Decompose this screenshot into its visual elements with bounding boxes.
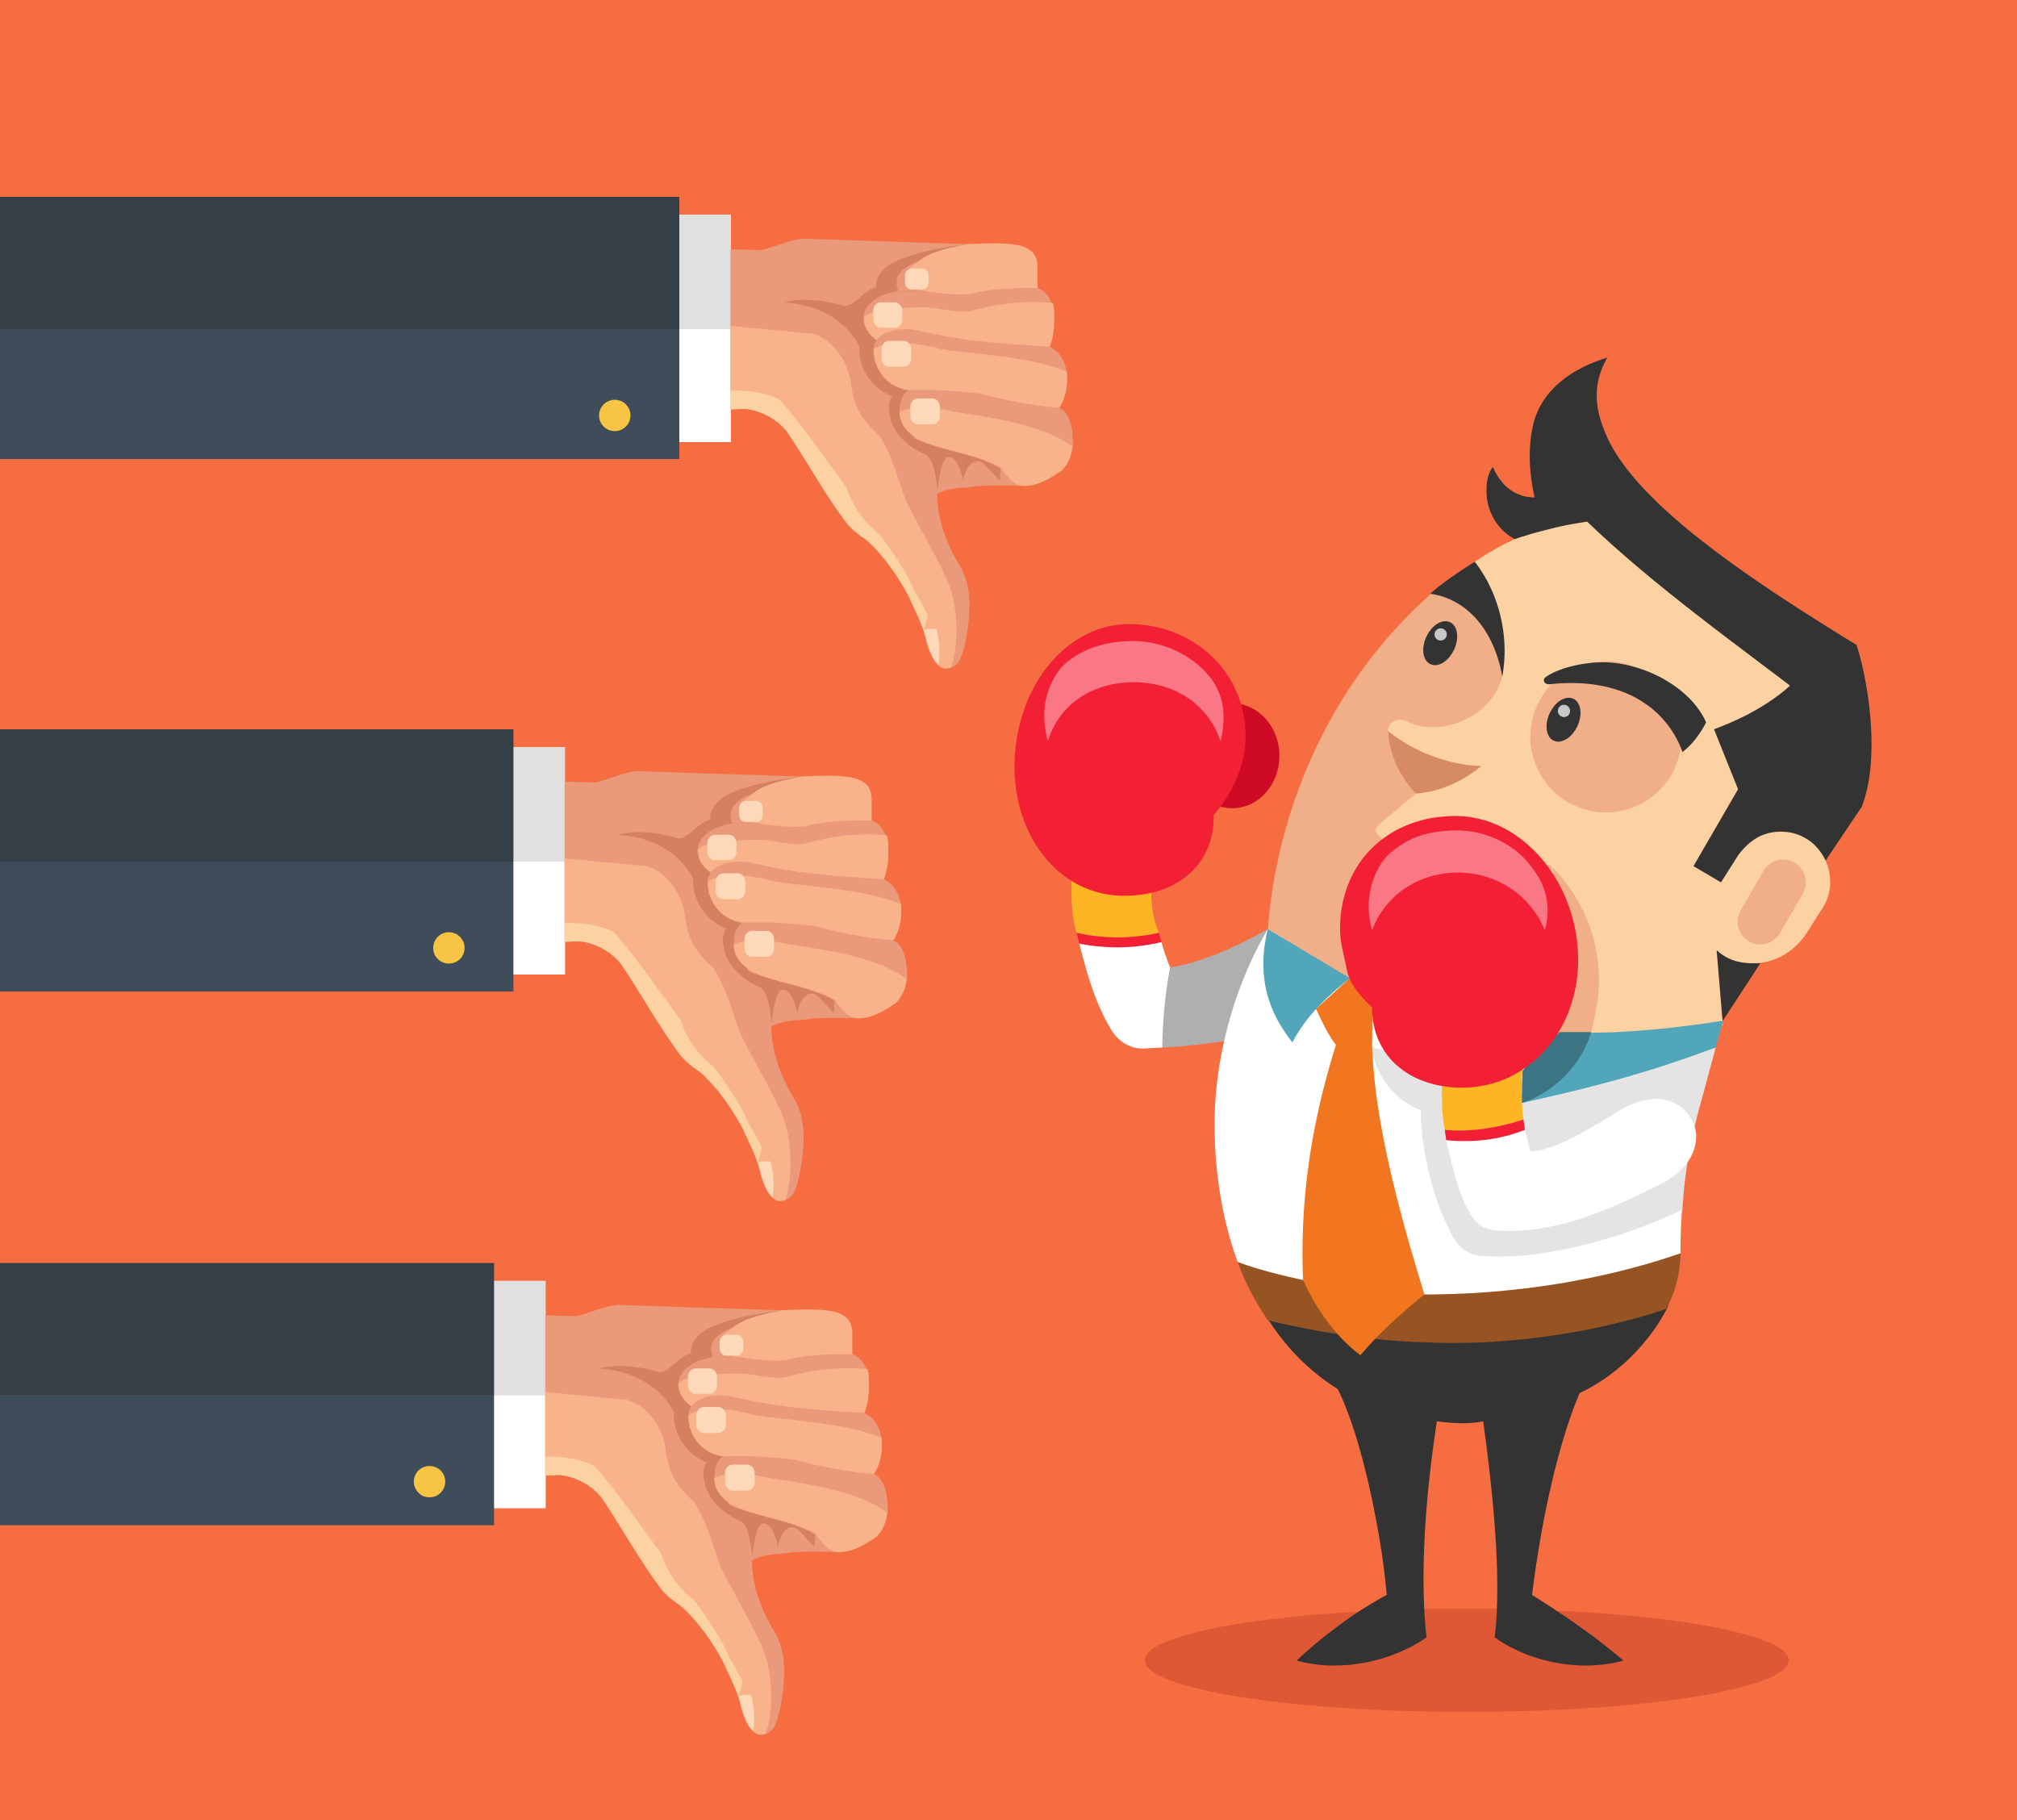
legs and shoes	[1268, 1305, 1668, 1666]
shirt	[1214, 929, 1723, 1295]
glove: front right	[1340, 816, 1578, 1087]
left collar	[1263, 929, 1350, 1042]
belt	[1238, 1254, 1681, 1343]
collar shadow	[1522, 1032, 1591, 1103]
hair	[1487, 357, 1872, 908]
face shade	[1268, 527, 1560, 1034]
torso	[1071, 878, 1723, 1355]
right collar	[1522, 1021, 1723, 1103]
wrist band	[1445, 1120, 1525, 1141]
folded arm sleeve	[1446, 1099, 1696, 1231]
mouth	[1389, 731, 1481, 794]
tie	[1302, 978, 1424, 1355]
collar, right arm and gloves	[1014, 624, 1723, 1257]
ear inner	[1760, 883, 1783, 922]
neck hair	[1717, 950, 1760, 1021]
head	[1268, 357, 1872, 1037]
raised arm	[1071, 878, 1267, 1049]
character: boxer businessman	[1014, 357, 1872, 1666]
wrist wrap	[1442, 1066, 1523, 1130]
left eyebrow	[1430, 561, 1505, 676]
right eye	[1540, 692, 1587, 747]
right eye socket	[1530, 661, 1681, 812]
face shadow from glove	[1553, 867, 1599, 1035]
glove: raised left	[1014, 624, 1280, 895]
face light	[1376, 522, 1831, 1037]
arm 2: sleeve, cuff and thumbs-down hand	[0, 729, 907, 1201]
arm 3: sleeve, cuff and thumbs-down hand	[0, 1263, 887, 1734]
arm 1: sleeve, cuff and thumbs-down hand	[0, 197, 1073, 669]
right eyebrow	[1544, 662, 1706, 752]
ground shadow	[1145, 1609, 1789, 1712]
left eye	[1417, 616, 1464, 670]
shirt shadow	[1372, 1047, 1716, 1257]
